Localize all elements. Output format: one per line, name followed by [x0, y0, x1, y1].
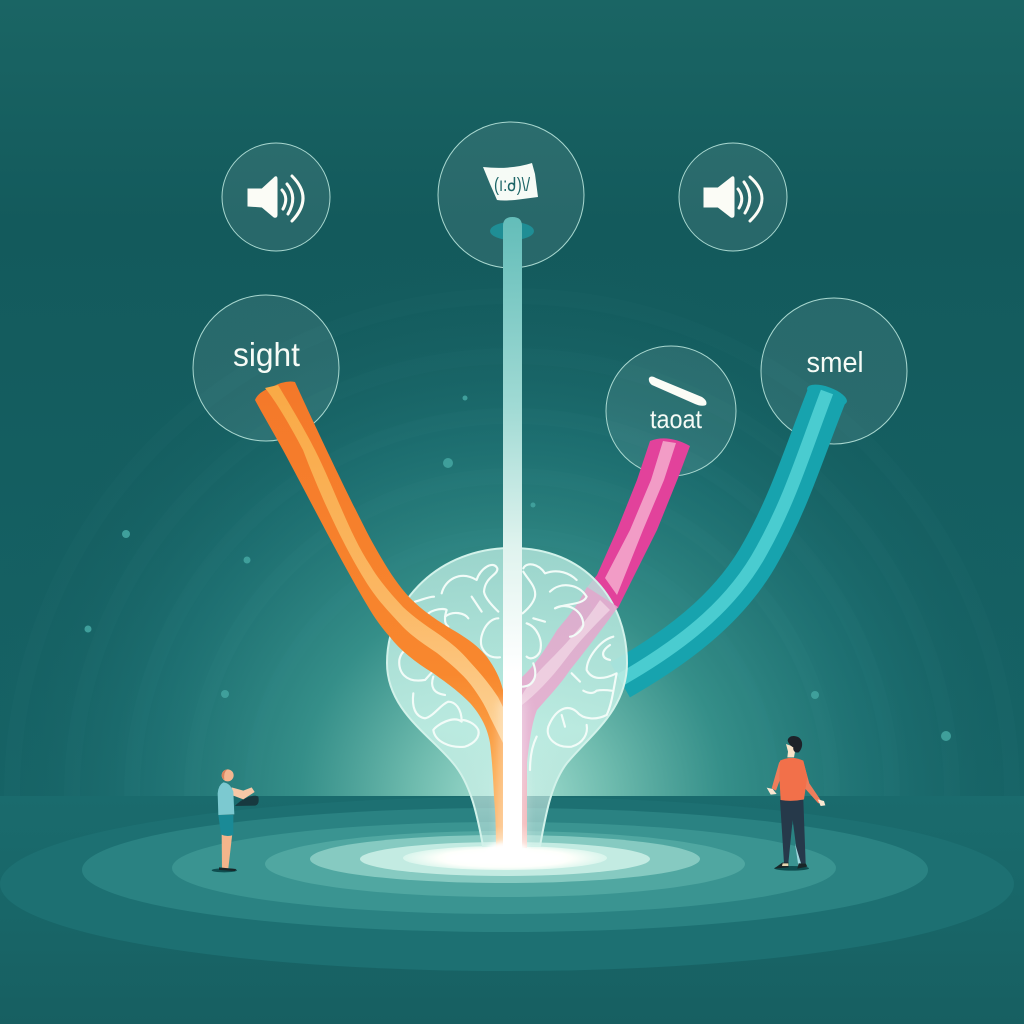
icon: speaker right — [704, 177, 762, 221]
figure: woman with tablet — [212, 769, 259, 872]
central light beam — [485, 217, 534, 862]
figure: man looking up — [767, 736, 825, 871]
hair — [788, 736, 802, 753]
head — [222, 769, 234, 781]
label: sight: sight — [233, 336, 300, 373]
torso — [218, 782, 234, 815]
circle: top sense — [438, 122, 584, 268]
hands — [767, 788, 777, 795]
torso — [779, 758, 807, 801]
arms — [772, 762, 784, 791]
floating particles — [84, 396, 951, 741]
neck and face — [786, 744, 795, 757]
legs — [222, 833, 232, 868]
tablet — [235, 796, 259, 806]
icon: top label plate — [483, 163, 538, 200]
brain folds — [399, 564, 617, 770]
ground with concentric ripple rings — [0, 796, 1024, 1024]
legs — [780, 800, 806, 863]
tube: sight orange — [255, 382, 503, 852]
label: smell: smel — [806, 347, 864, 379]
circle: smell — [761, 298, 907, 444]
circle: sound right — [679, 143, 787, 251]
icon: top label plate: (ı:ᑯ)\/ — [494, 175, 531, 196]
circle: sound left — [222, 143, 330, 251]
brain bulb — [387, 548, 627, 848]
arm — [232, 787, 255, 799]
pink tube seen through brain — [522, 587, 618, 848]
circle: sight — [193, 295, 339, 441]
icon: taste utensil — [649, 376, 706, 406]
tube: taste pink — [585, 438, 690, 620]
label: taste: taoat — [650, 404, 703, 434]
shorts — [218, 815, 233, 836]
icon: speaker left — [248, 176, 303, 221]
circle: taste — [606, 346, 736, 476]
shoes — [219, 867, 236, 871]
tube: smell teal — [620, 380, 849, 680]
shoes — [774, 863, 789, 869]
pink highlight — [522, 600, 610, 705]
